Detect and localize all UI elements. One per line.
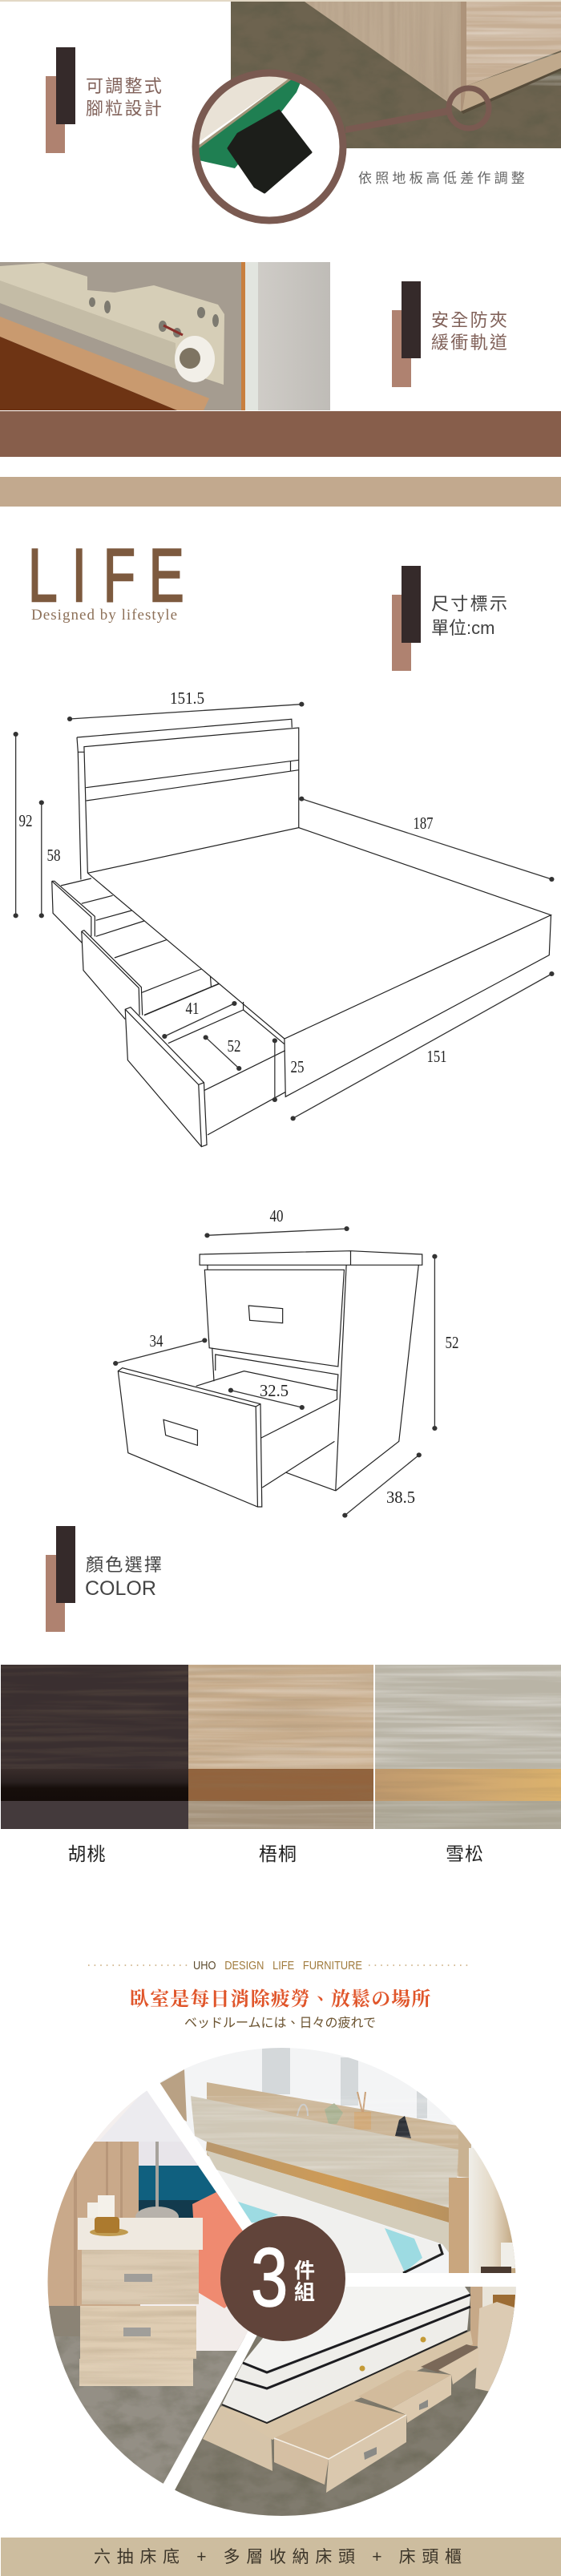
dimension labels: 92 (19, 811, 32, 830)
bed line drawing (52, 719, 551, 1147)
logo: LIFE: LIFE (28, 535, 184, 618)
tagline: Designed by lifestyle (31, 607, 177, 624)
swatch labels (67, 1843, 484, 1864)
photo: drawer rail (0, 262, 330, 410)
footer band (1, 2538, 561, 2576)
panel: dimensions heading (392, 566, 509, 671)
dimension labels: 151.5 (170, 688, 204, 708)
swatch: walnut (1, 1665, 188, 1829)
caption: floor adjustment: 依照地板高低差作調整 (358, 171, 528, 186)
photo: nightstand (48, 2090, 248, 2484)
heading: color (85, 1555, 163, 1600)
heading: color: COLOR (85, 1577, 156, 1600)
panel: adjustable feet (46, 2, 561, 220)
panel: three-piece set (1, 1959, 561, 2576)
dimension labels: 32.5 (260, 1381, 289, 1400)
dimension labels: 52 (446, 1333, 458, 1352)
badge: 3-piece: 組 (294, 2280, 315, 2304)
objects on shelf (297, 2092, 411, 2138)
heading: soft close rail: 安全防夾 (431, 310, 509, 330)
heading: soft close rail: 緩衝軌道 (431, 333, 509, 353)
subtitle: ベッドルームには、日々の疲れで (184, 2016, 376, 2030)
photo: drawers (168, 2287, 521, 2519)
panel: color options (1, 1526, 561, 1864)
icon: small magnifier ring (449, 88, 489, 128)
heading: dimensions: 單位:cm (431, 618, 494, 638)
accent bars (392, 281, 421, 387)
brown band (0, 411, 561, 457)
badge: 3-piece: 件 (294, 2259, 315, 2283)
swatch: paulownia (188, 1665, 373, 1829)
nightstand line drawing (118, 1251, 422, 1507)
dimension labels: 34 (149, 1331, 163, 1351)
dimension labels: 38.5 (386, 1488, 415, 1507)
dimension labels (19, 688, 447, 1076)
connector line (345, 107, 449, 133)
dimension labels: 151 (426, 1047, 447, 1066)
dimension labels: 187 (414, 814, 433, 833)
accent bars (46, 47, 75, 153)
dimension lines (14, 702, 555, 1120)
dimension labels: 25 (290, 1057, 305, 1076)
badge: 3-piece (220, 2216, 345, 2341)
top strip (0, 0, 561, 2)
title: 臥室是每日消除疲勞、放鬆の場所 (130, 1988, 431, 2010)
diagram: bed with dimensions (14, 688, 555, 1147)
icon: zoomed foot circle (184, 56, 343, 220)
footer band: 六抽床底 + 多層收納床頭 + 床頭櫃 (94, 2548, 462, 2566)
swatch labels: 胡桃 (67, 1843, 106, 1864)
swatch labels: 梧桐 (259, 1843, 297, 1864)
badge: 3-piece: 3 (251, 2231, 288, 2324)
photo: cabinet corner on floor (231, 2, 561, 148)
photo circle (47, 2044, 529, 2519)
diagram: nightstand with dimensions (113, 1206, 458, 1518)
beige band (0, 477, 561, 507)
dimension labels: 58 (46, 846, 61, 865)
dimension labels (149, 1206, 458, 1507)
swatch: snow pine (375, 1665, 561, 1829)
heading: color: 顏色選擇 (86, 1555, 163, 1575)
accent bars (392, 566, 421, 671)
dimension labels: 40 (269, 1206, 284, 1225)
dimension lines (113, 1226, 438, 1518)
heading: dimensions: 尺寸標示 (431, 594, 509, 614)
accent bars (46, 1526, 75, 1632)
heading: adjustable feet: 腳粒設計 (86, 99, 163, 119)
dimension labels: 52 (228, 1036, 240, 1056)
panel: soft close rail (0, 262, 509, 410)
photo: headboard (152, 2044, 529, 2276)
eyebrow: UHO design: UHO DESIGN LIFE FURNITURE (193, 1959, 362, 1972)
dimension labels: 41 (186, 999, 199, 1018)
swatch labels: 雪松 (446, 1843, 484, 1864)
heading: adjustable feet: 可調整式 (86, 76, 163, 96)
